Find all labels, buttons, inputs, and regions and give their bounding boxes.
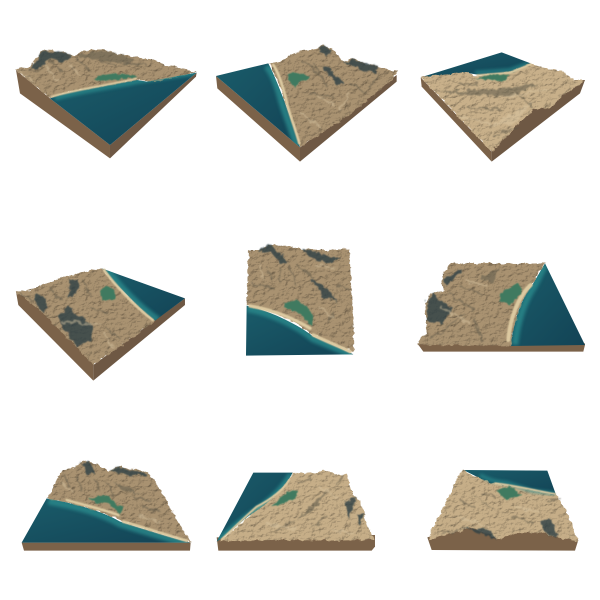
block soil sides — [216, 75, 397, 162]
land surface — [16, 49, 197, 98]
lagoon — [88, 495, 123, 515]
panel: terrain block middle-right — [417, 263, 585, 352]
mountain shadows — [63, 462, 160, 522]
block soil side — [427, 523, 578, 551]
mountain shadows — [20, 278, 120, 347]
beach — [222, 480, 289, 539]
beach — [104, 270, 153, 320]
beach — [477, 64, 531, 75]
beach — [67, 500, 187, 541]
shoreline — [515, 265, 545, 345]
shoreline — [55, 73, 197, 98]
mountain shadows — [253, 245, 350, 322]
lagoon — [500, 283, 523, 305]
sea surface — [102, 268, 185, 321]
land surface — [16, 268, 155, 365]
lagoon — [272, 490, 298, 507]
sea surface — [216, 63, 300, 147]
panel: terrain block bottom-right — [427, 469, 578, 551]
land surface — [268, 45, 397, 147]
mountain shadows — [267, 477, 365, 533]
sea surface — [50, 73, 197, 145]
lagoon — [93, 73, 137, 81]
mountain shadows — [443, 490, 560, 540]
shoreline — [217, 474, 291, 541]
beach — [52, 79, 136, 97]
panel: terrain block centre — [246, 244, 354, 356]
lagoon — [100, 285, 115, 300]
block soil side — [417, 343, 585, 352]
land surface — [421, 63, 585, 152]
beach — [273, 65, 299, 143]
sea surface — [421, 52, 531, 77]
sea surface — [246, 306, 353, 356]
lagoon — [497, 487, 522, 500]
lagoon — [283, 300, 313, 327]
lagoon — [288, 73, 310, 88]
panel: terrain block top-left — [16, 49, 197, 158]
land surface — [247, 244, 354, 352]
shoreline — [267, 66, 297, 147]
land surface — [47, 461, 191, 542]
block soil sides — [16, 70, 197, 158]
land surface — [427, 469, 578, 542]
panel: terrain block middle-left — [16, 268, 185, 381]
shoreline — [475, 63, 528, 73]
beach — [250, 306, 350, 352]
sea surface — [463, 470, 557, 497]
ridge shading — [437, 83, 547, 137]
sea surface — [217, 473, 293, 542]
mountain shadows — [20, 51, 147, 80]
block soil sides — [421, 77, 585, 162]
block soil sides — [16, 292, 185, 381]
panel: terrain block top-right — [421, 52, 585, 162]
mountain shadows — [427, 267, 500, 340]
beach — [508, 285, 531, 340]
beach — [495, 483, 555, 494]
shoreline — [247, 309, 353, 356]
lagoon — [475, 74, 510, 82]
panel: terrain block top-centre — [216, 45, 397, 162]
mountain shadows — [300, 45, 380, 127]
land surface — [220, 470, 375, 542]
sea surface — [511, 263, 585, 346]
sea surface — [22, 498, 191, 543]
shoreline — [48, 501, 190, 544]
panel: terrain block bottom-centre — [217, 470, 375, 551]
land surface — [417, 263, 545, 346]
shoreline — [480, 475, 555, 493]
block soil side — [217, 535, 375, 551]
block soil side — [22, 543, 191, 551]
panel: terrain block bottom-left — [22, 461, 191, 551]
shoreline — [106, 268, 158, 320]
